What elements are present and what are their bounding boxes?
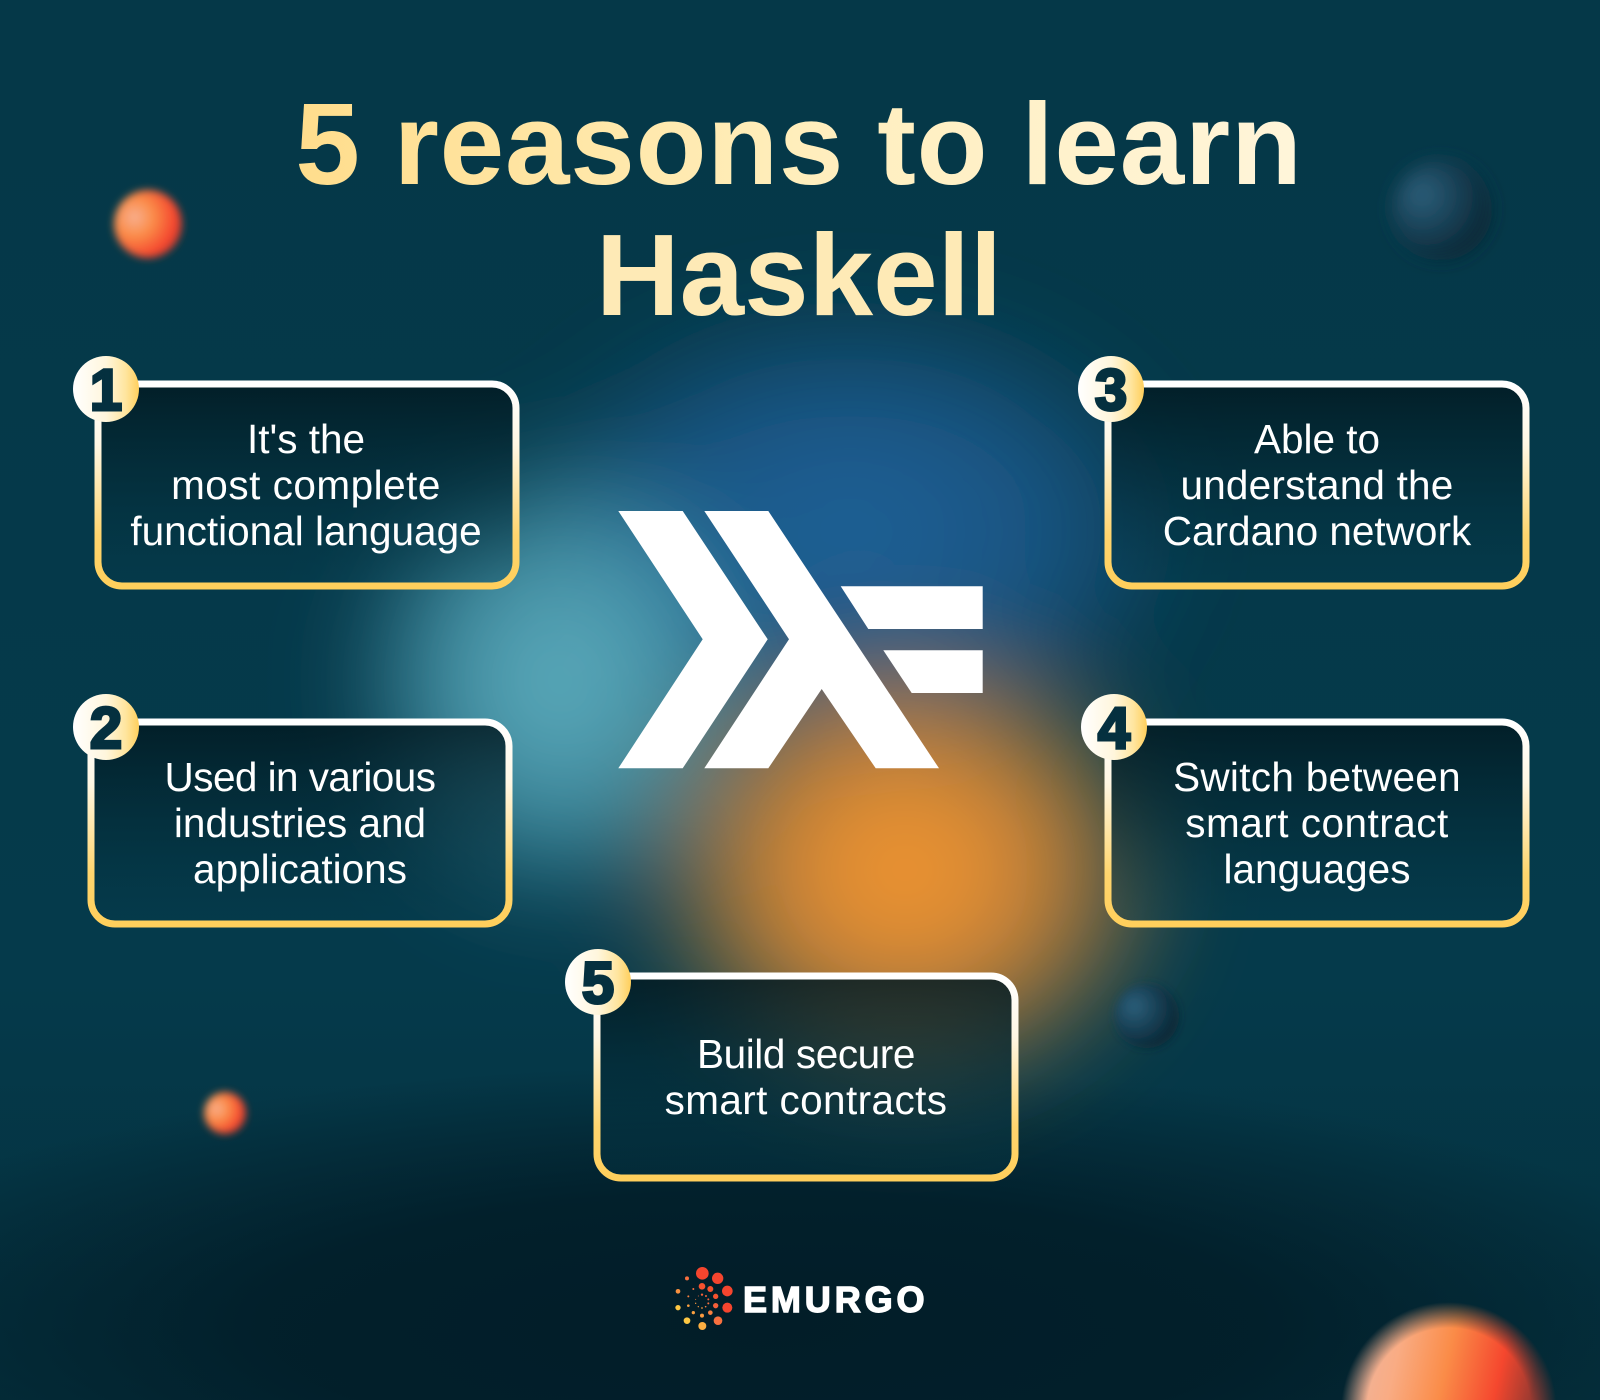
title: 5 reasons to learn [295, 79, 1303, 209]
card 1 [73, 356, 516, 586]
card 5 [565, 949, 1015, 1178]
badge 3: 3 [1095, 358, 1127, 423]
emurgo logo [675, 1267, 928, 1330]
badge 5: 5 [582, 951, 614, 1016]
badge 4 [1081, 694, 1147, 761]
sphere: dark top right [1392, 160, 1492, 260]
badge 1 [73, 356, 139, 423]
card 4: languages [1224, 846, 1410, 892]
wordmark: EMURGO [743, 1279, 928, 1320]
sphere: orange top left [114, 190, 182, 258]
card 3: Able to [1254, 416, 1380, 462]
card 3 [1078, 356, 1526, 586]
card 2: Used in various [165, 754, 435, 800]
icon: emurgo dots [675, 1267, 733, 1330]
badge 3 [1078, 356, 1144, 423]
badge 5 [565, 949, 631, 1016]
card 3: understand the [1180, 462, 1454, 508]
card 2: industries and [174, 800, 426, 846]
card 2 [73, 694, 509, 924]
card 4: Switch between [1173, 754, 1461, 800]
sphere: dark lower right [1115, 984, 1179, 1048]
badge 1: 1 [90, 358, 122, 423]
card 1: functional language [130, 508, 482, 554]
card 1: most complete [171, 462, 441, 508]
card 5: smart contracts [665, 1077, 947, 1123]
sphere: small orange lower left [204, 1092, 246, 1134]
title [295, 79, 1303, 340]
card 4: smart contract [1185, 800, 1449, 846]
card 2: applications [193, 846, 407, 892]
haskell logo [618, 511, 983, 768]
badge 2 [73, 694, 139, 761]
title: Haskell [596, 210, 1002, 340]
badge 4: 4 [1098, 696, 1130, 761]
badge 2: 2 [90, 696, 122, 761]
card 4 [1081, 694, 1526, 924]
sphere: large orange bottom right [1340, 1296, 1560, 1400]
card 5: Build secure [697, 1031, 915, 1077]
card 1: It's the [247, 416, 365, 462]
card 3: Cardano network [1163, 508, 1472, 554]
